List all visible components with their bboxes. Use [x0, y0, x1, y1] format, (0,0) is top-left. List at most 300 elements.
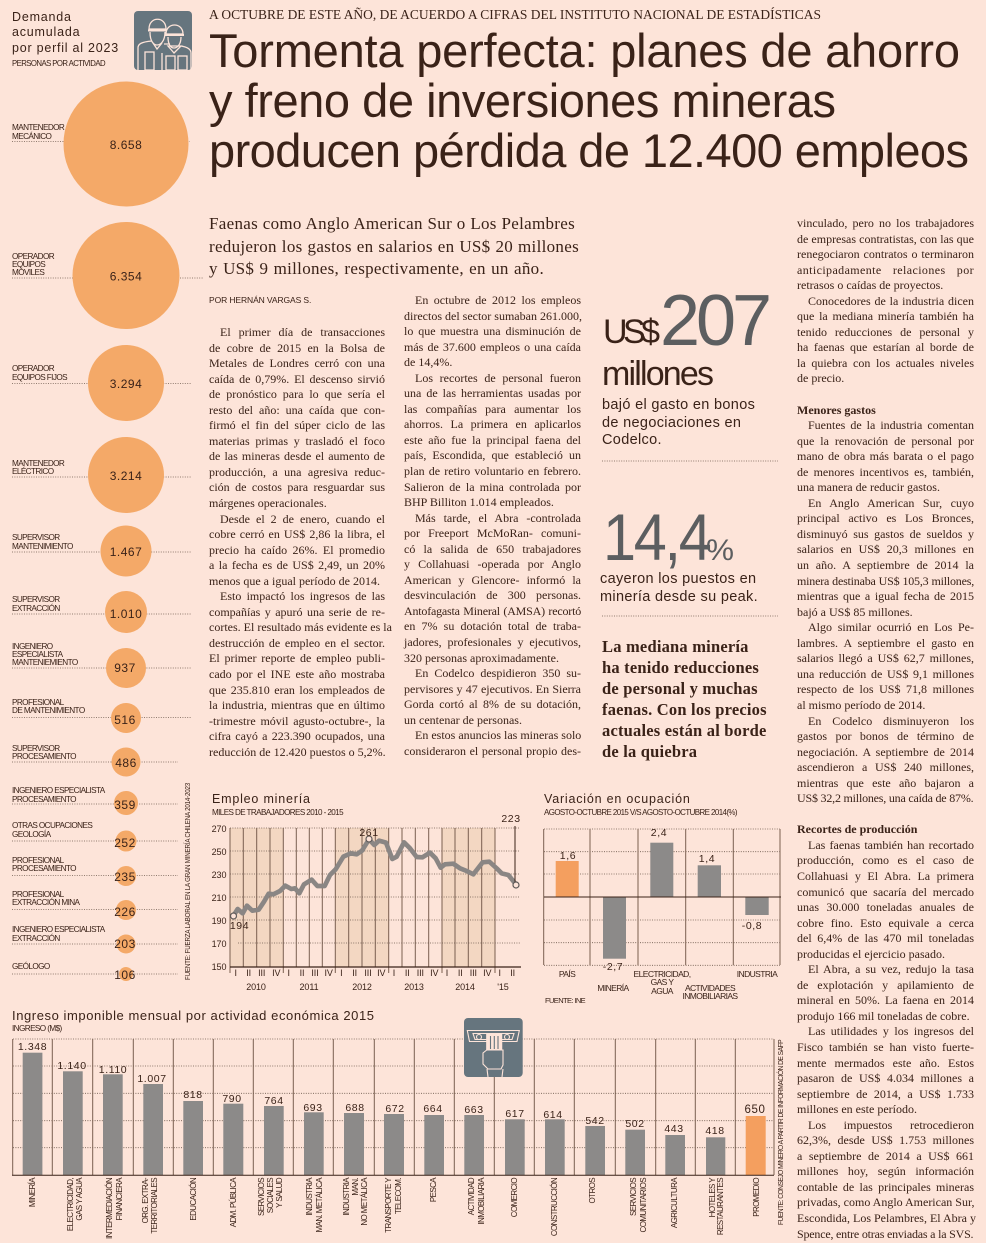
text column 2: Salieron de la mina controlada por — [404, 480, 581, 494]
text column 1: Desde el 2 de enero, cuando el — [220, 512, 385, 526]
chart: ingreso imponible mensual: Ingreso imponible mensual por actividad económica 2015 — [12, 1008, 374, 1023]
text column 3: respecto de los US$ 71,8 millones — [797, 682, 974, 696]
bubble: supervisor extracción: 1.010 — [110, 607, 142, 621]
chart: empleo minería — [212, 792, 521, 992]
bar labels: PROMEDIO — [752, 1178, 761, 1217]
chart: empleo minería: Empleo minería — [212, 792, 311, 806]
callout: US$ 207 millones: millones — [602, 355, 714, 393]
bubble: ingeniero especialista procesamiento: 359 — [114, 798, 136, 812]
text column 2: directos del sector sumaban 261.000, — [404, 309, 582, 323]
text column 3: privadas, como Anglo American Sur, — [797, 1195, 974, 1209]
bar values: 542 — [585, 1115, 605, 1127]
text column 1: cortes. El resultado más evidente es la — [209, 620, 392, 634]
text column 2: una de las herramientas usadas por — [404, 386, 581, 400]
bar labels: Y SALUD — [275, 1177, 284, 1208]
bar values: 664 — [423, 1103, 443, 1115]
icon: cash machine hand — [464, 1018, 523, 1077]
callout text: gasto en bonos — [602, 397, 755, 448]
text column 1: caída de 0,79%. El descenso sirvió — [209, 372, 385, 386]
bar values: 764 — [264, 1095, 284, 1107]
lead paragraph: y US$ 9 millones, respectivamente, en un año. — [209, 259, 544, 278]
text column 3: Los impuestos retrocedieron — [808, 1118, 974, 1132]
callout: US$ 207 millones: 207 — [660, 281, 772, 361]
bubble: operador equipos fijos: OPERADOR — [12, 364, 55, 373]
text column 3: 62,3%, desde US$ 1.753 millones — [797, 1133, 974, 1147]
bar labels — [28, 1177, 761, 1239]
text column 3: de precio. — [797, 371, 844, 385]
text column 2: Antofagasta Mineral (AMSA) recortó — [404, 604, 581, 618]
bar: electricidad gas y agua: 2,4 — [651, 827, 667, 839]
text column 2: por Freeport McMoRan- comuni- — [404, 526, 581, 540]
chart: empleo minería: 2013 — [404, 982, 424, 992]
chart: empleo minería: IV — [325, 968, 333, 978]
text column 2: desvinculación de 300 personas. — [404, 588, 581, 602]
bar values: 650 — [744, 1104, 766, 1116]
text column 1: El primer día de transacciones — [220, 325, 385, 339]
callout: US$ 207 millones — [602, 281, 772, 393]
text column 1: márgenes operacionales. — [209, 496, 327, 510]
source: consejo minero: FUENTE: CONSEJO MINERO A PARTIR DE INFORMACIÓN DE SAFP — [776, 1039, 785, 1225]
text column 3: Collahuasi y El Abra. La primera — [797, 869, 974, 883]
text column 2: de 14,4%. — [404, 355, 452, 369]
title: y freno de inversiones mineras — [209, 74, 836, 127]
callout text: puestos: minería desde su peak. — [600, 588, 758, 604]
bubble: ingeniero especialista procesamiento: INGENIERO ESPECIALISTA — [12, 786, 106, 795]
bar: electricidad gas y agua: AGUA — [651, 986, 674, 996]
text column 3: que la mediana minería también ha — [797, 309, 974, 323]
chart: empleo minería: IV — [377, 968, 386, 978]
chart: empleo minería: II — [300, 968, 304, 978]
bubble: operador equipos móviles: 6.354 — [110, 270, 142, 284]
text column 3: minera destinaba US$ 105,3 millones, — [797, 574, 974, 588]
text column 3: negociación. A septiembre de 2014 — [797, 745, 974, 759]
bubble: mantenedor mecánico: MANTENEDOR — [12, 123, 65, 132]
text column 3: de explotación y apilamiento de — [797, 978, 974, 992]
chart: variación en ocupación: AGOSTO-OCTUBRE 2015 V/S AGOSTO-OCTUBRE 2014(%) — [544, 808, 738, 817]
bar: electricidad gas y agua — [634, 827, 691, 996]
source: fuerza laboral: FUENTE: FUERZA LABORAL EN LA GRAN MINERÍA CHILENA 2014-2023 — [183, 783, 192, 980]
chart: empleo minería: 210 — [212, 893, 226, 903]
bubble: profesional procesamiento: PROFESIONAL — [12, 856, 65, 865]
chart: empleo minería: 270 — [212, 824, 226, 834]
bubble: operador equipos móviles: OPERADOR — [12, 252, 55, 261]
text column 3: millones hoy, según información — [797, 1164, 974, 1178]
chart: empleo minería: 190 — [212, 916, 226, 926]
bar labels: CONSTRUCCIÓN — [550, 1177, 559, 1236]
text column 2: 320 personas aproximadamente. — [404, 651, 559, 665]
chart: empleo minería: 170 — [212, 939, 226, 949]
bubble: mantenedor eléctrico — [12, 437, 164, 513]
text column 2: este año fue la principal faena del — [404, 433, 581, 447]
text column 1: Metales de Londres cerró con una — [209, 356, 385, 370]
chart: variación en ocupación: FUENTE: INE — [545, 996, 586, 1005]
bubble: otras ocupaciones geología: 252 — [114, 836, 136, 850]
bubble: geólogo: GEÓLOGO — [12, 961, 50, 971]
text column 2: ahorros. La primera en aplicarlos — [404, 417, 581, 431]
bar labels: SERVICIOS — [257, 1178, 266, 1216]
text column 3: disminuyó sus gastos de sueldos y — [797, 527, 974, 541]
chart: empleo minería: III — [417, 968, 424, 978]
text column 3: ha faenas que estarían al borde de — [797, 340, 974, 354]
bubble: operador equipos móviles: EQUIPOS — [12, 260, 46, 269]
chart: empleo minería: III — [364, 968, 372, 978]
bar: minería — [597, 897, 630, 993]
bubble: ingeniero especialista mantenimiento: INGENIERO — [12, 642, 53, 651]
bubble: mantenedor eléctrico: MANTENEDOR — [12, 459, 65, 468]
text column 2: Gorda cortó al 8% de su dotación, — [404, 697, 581, 711]
text column 3: vinculado, pero no los trabajadores — [797, 216, 974, 230]
bubble: profesional de mantenimiento — [12, 698, 141, 733]
bar labels: RESTAURANTES — [716, 1178, 725, 1235]
chart: variación en ocupación — [544, 792, 781, 1005]
bar labels: TRANSPORTE Y — [384, 1177, 393, 1233]
text column 3: al mismo período de 2014. — [797, 698, 925, 712]
bubble: profesional extracción mina: 226 — [114, 905, 136, 919]
text column 3: un año. A septiembre de 2014 la — [797, 558, 974, 572]
bubble: mantenedor eléctrico: 3.214 — [110, 469, 142, 483]
text column 3: salarios en US$ 20,3 millones en — [797, 542, 974, 556]
text column 3: millones en este período. — [797, 1102, 917, 1116]
bubble: supervisor mantenimiento: 1.467 — [110, 545, 142, 559]
chart: empleo minería: 2010 — [246, 982, 266, 992]
chart: empleo minería: 223 — [501, 813, 521, 825]
lead paragraph — [209, 214, 579, 278]
bubble: geólogo: 106 — [114, 968, 136, 982]
bubble: supervisor extracción: EXTRACCIÓN — [12, 603, 60, 613]
bubble: otras ocupaciones geología: GEOLOGÍA — [12, 829, 52, 839]
bar values: 1.007 — [137, 1073, 167, 1085]
bar labels: AGRICULTURA — [670, 1177, 679, 1228]
bar: actividades inmobiliarias: ACTIVIDADES — [685, 983, 736, 993]
bar values: 688 — [345, 1102, 365, 1114]
text column 3: una reducción de US$ 9,1 millones — [797, 667, 974, 681]
bar values: 502 — [625, 1118, 645, 1130]
text column 2: có la salida de 650 trabajadores — [404, 542, 581, 556]
chart: empleo minería: 230 — [212, 870, 226, 880]
bubble: profesional extracción mina: PROFESIONAL — [12, 890, 65, 899]
callout: 14,4%: % — [706, 534, 734, 567]
text column 2: jadores, profesionales y ejecutivos, — [404, 635, 581, 649]
text column 3: Conocedores de la industria dicen — [808, 294, 974, 308]
text column 1: destrucción de empleo en el sector. — [209, 636, 385, 650]
text column 3: unas 30.000 toneladas anuales de — [797, 900, 974, 914]
text column 2: Más tarde, el Abra -controlada — [415, 511, 581, 525]
bar labels: GAS Y AGUA — [75, 1177, 84, 1221]
bar labels: TELECOM. — [394, 1178, 403, 1214]
chart: empleo minería: '15 — [497, 982, 509, 992]
bar values: 614 — [543, 1109, 563, 1121]
text column 1: compañías y apuró una serie de re- — [209, 605, 385, 619]
chart: empleo minería: I — [234, 968, 237, 978]
text column 3: mano de obra más barata o el pago — [797, 449, 974, 463]
bar: industria: INDUSTRIA — [737, 969, 778, 979]
lead paragraph: Faenas como Anglo American Sur o Los Pelambres — [209, 214, 575, 233]
text column 2: y Collahuasi -operada por Anglo — [404, 557, 581, 571]
callout text: puestos: cayeron los puestos en — [600, 571, 756, 587]
bubble: otras ocupaciones geología — [12, 821, 136, 852]
callout text: gasto en bonos: de negociaciones en — [602, 414, 741, 430]
chart: empleo minería: IV — [430, 968, 439, 978]
bar: minería: MINERÍA — [597, 983, 630, 993]
bubble: supervisor procesamiento — [12, 744, 140, 776]
bubble chart: demand by profile — [12, 82, 203, 982]
chart: empleo minería: I — [287, 968, 290, 978]
bar labels: ELECTRICIDAD, — [66, 1178, 75, 1231]
bubble: supervisor mantenimiento — [12, 526, 152, 576]
text column 1: producción, a una agresiva reduc- — [209, 465, 385, 479]
panel heading: demanda acumulada — [12, 10, 119, 68]
bar values: 818 — [183, 1089, 203, 1101]
bar values: 443 — [664, 1123, 684, 1135]
text column 3: ascendieron a US$ 240 millones, — [797, 760, 974, 774]
text column 3: principal activo es Los Bronces, — [797, 511, 974, 525]
chart: empleo minería: 261 — [359, 827, 379, 839]
bar values: 672 — [385, 1103, 405, 1115]
icon: mine workers — [134, 11, 192, 70]
bubble: ingeniero especialista mantenimiento: MANTENIEMIENTO — [12, 658, 78, 667]
text column 1: de pronóstico para lo que sería el — [209, 387, 385, 401]
chart: empleo minería: I — [393, 968, 395, 978]
pull quote: La mediana minería — [602, 637, 749, 656]
text column 3: tenido reducciones de personal y — [797, 325, 974, 339]
chart: empleo minería: II — [352, 968, 357, 978]
text column 3: Menores gastos — [797, 403, 876, 417]
chart: empleo minería: II — [458, 968, 463, 978]
callout text: puestos — [600, 571, 758, 604]
bar values: 693 — [303, 1102, 323, 1114]
text column 3: Spence, entre otras enviadas a la SVS. — [797, 1227, 973, 1241]
text column 1: de las mineras desde el aumento de — [209, 449, 385, 463]
text column 1: de cobre de 2015 en la Bolsa de — [209, 341, 385, 355]
bar labels: FINANCIERA — [115, 1177, 124, 1220]
bubble: mantenedor eléctrico: ELÉCTRICO — [12, 466, 54, 476]
text column 3: contable de las principales mineras — [797, 1180, 974, 1194]
bar labels: ORG. EXTRA- — [141, 1177, 150, 1223]
chart: empleo minería: II — [510, 968, 515, 978]
bubble: operador equipos móviles — [12, 222, 180, 329]
bar labels: ACTIVIDAD — [467, 1177, 476, 1215]
text column 1: El primer reporte de empleo publi- — [209, 651, 385, 665]
text column 3: bajó a US$ 85 millones. — [797, 605, 913, 619]
bubble: ingeniero especialista mantenimiento: 937 — [114, 661, 136, 675]
bar: industria: -0,8 — [742, 920, 762, 932]
title: Tormenta perfecta: planes de ahorro — [209, 24, 960, 77]
bar labels: TERRITORIALES — [150, 1178, 159, 1234]
bar labels: EDUCACIÓN — [189, 1177, 198, 1221]
bar: minería: -2,7 — [603, 961, 623, 973]
bubble: profesional de mantenimiento: DE MANTENIMIENTO — [12, 706, 85, 715]
text column 2: más de 37.600 empleos o una caída — [404, 340, 581, 354]
text column 1: reducción de 12.420 puestos o 5,2%. — [209, 745, 386, 759]
bar labels: COMUNITARIOS — [639, 1178, 648, 1232]
text column 3: mineral en 50%. La faena en 2014 — [797, 993, 974, 1007]
text column 2: consideraron el personal propio des- — [404, 744, 581, 758]
bubble: supervisor extracción — [12, 591, 147, 633]
bar labels: COMERCIO — [510, 1178, 519, 1217]
title — [209, 24, 969, 177]
bar labels: INMOBILIARIA — [477, 1177, 486, 1225]
text column 1: materias primas y trasladó el foco — [209, 434, 385, 448]
text column 3: lambres. A septiembre el gasto en — [797, 636, 974, 650]
text column 2: un centenar de personas. — [404, 713, 522, 727]
text column 3: cobre fino. Esto equivale a cerca — [797, 916, 974, 930]
bar: electricidad gas y agua: ELECTRICIDAD, — [634, 969, 691, 979]
bar: país: PAÍS — [559, 969, 576, 979]
bar labels: SERVICIOS — [629, 1178, 638, 1216]
text column 2: lo que muestra una disminución de — [404, 324, 581, 338]
pull quote: ha tenido reducciones — [602, 658, 759, 677]
text column 3: a septiembre de 2014 a US$ 661 — [797, 1149, 974, 1163]
bar labels: OTROS — [588, 1178, 597, 1203]
bubble: profesional procesamiento: 235 — [114, 870, 136, 884]
text column 3: una manera de reducir gastos. — [797, 480, 940, 494]
text column 3: Algo similar ocurrió en Los Pe- — [808, 620, 974, 634]
bars: income by activity — [23, 1053, 766, 1175]
text column 3: comunicó que sacaría del mercado — [797, 885, 974, 899]
text column 2: En Codelco despidieron 350 su- — [415, 666, 581, 680]
text column 3: En Anglo American Sur, cuyo — [808, 496, 974, 510]
bubble: ingeniero especialista extracción: 203 — [114, 937, 136, 951]
bar labels: HOTELES Y — [708, 1177, 717, 1217]
text column 1: firmó el fin del súper ciclo de las — [209, 418, 385, 432]
bar labels: SOCIALES — [266, 1178, 275, 1213]
text column 1: cado por el INE este año mostraba — [209, 667, 385, 681]
pull quote: de personal y muchas — [602, 679, 758, 698]
chart: ingreso imponible mensual: INGRESO (M$) — [12, 1024, 63, 1033]
chart: empleo minería: III — [470, 968, 477, 978]
chart: empleo minería: IV — [272, 968, 281, 978]
panel heading: demanda acumulada: acumulada — [12, 25, 80, 39]
chart: empleo minería: 250 — [212, 847, 226, 857]
text column 1: -trimestre móvil agusto-octubre-, la — [209, 714, 385, 728]
text column 1: que 235.810 eran los empleados de — [209, 683, 385, 697]
bar labels: MINERÍA — [28, 1177, 37, 1207]
bubble: ingeniero especialista mantenimiento: ESPECIALISTA — [12, 650, 64, 659]
bubble: profesional de mantenimiento: PROFESIONAL — [12, 698, 65, 707]
callout: 14,4%: 14,4 — [603, 501, 711, 575]
bubble: mantenedor mecánico — [12, 82, 188, 206]
text column 2: plan de retiro voluntario en febrero. — [404, 464, 581, 478]
text column 3: Las utilidades y los ingresos del — [808, 1024, 974, 1038]
bar labels: NO METÁLICA — [360, 1177, 369, 1226]
bar labels: INTERMEDIACIÓN — [105, 1177, 114, 1239]
chart: empleo minería: 194 — [230, 920, 249, 932]
chart: ingreso imponible mensual — [12, 1008, 785, 1239]
callout: US$ 207 millones: US$ — [603, 313, 660, 351]
chart: empleo minería: MILES DE TRABAJADORES 2010 - 2015 — [212, 808, 344, 817]
text column 2: En estos anuncios las mineras solo — [415, 728, 581, 742]
bar labels: INDUSTRIA — [342, 1177, 351, 1216]
chart: empleo minería: IV — [483, 968, 492, 978]
text column 2: las compañías para aumentar los — [404, 402, 581, 416]
bubble: geólogo — [12, 961, 136, 982]
text column 3: salarios llegó a US$ 62,7 millones, — [797, 651, 974, 665]
bar labels: MAN. METÁLICA — [315, 1177, 324, 1232]
chart: empleo minería: 2014 — [455, 982, 475, 992]
callout text: gasto en bonos: bajó el gasto en bonos — [602, 397, 755, 413]
bar values: 1.348 — [18, 1041, 47, 1053]
bar labels: MAN. — [351, 1178, 360, 1196]
bubble: operador equipos fijos: EQUIPOS FIJOS — [12, 373, 68, 382]
chart: empleo minería: II — [405, 968, 410, 978]
bubble: ingeniero especialista procesamiento: PROCESAMIENTO — [12, 795, 76, 804]
line: employment series — [233, 839, 517, 916]
bubble: ingeniero especialista procesamiento — [12, 786, 138, 815]
text column 3: producción, como es el caso de — [797, 853, 974, 867]
text column 3: mientras que a igual fecha de 2015 — [797, 589, 974, 603]
pull quote: de la quiebra — [602, 742, 697, 761]
text column 3: US$ 32,2 millones, una caída de 87%. — [797, 791, 973, 805]
text column 3: de empresas contratistas, con las que — [797, 232, 974, 246]
text column 3: mientras que este año bajaron a — [797, 776, 974, 790]
text column 3: gastos por bonos de término de — [797, 729, 974, 743]
text column 3: Las faenas también han recortado — [808, 838, 974, 852]
bar: actividades inmobiliarias: 1,4 — [699, 853, 715, 865]
bubble: ingeniero especialista extracción: EXTRACCIÓN — [12, 933, 60, 943]
text column 3: renegociaron contratos o terminaron — [797, 247, 974, 261]
chart: empleo minería: 2012 — [352, 982, 372, 992]
text column 3: septiembre de 2014, a US$ 1.733 — [797, 1087, 974, 1101]
panel heading: demanda acumulada: PERSONAS POR ACTIVIDAD — [12, 59, 106, 68]
text column 2: país, Escondida, que estableció un — [404, 448, 581, 462]
bar values: 418 — [705, 1125, 725, 1137]
bar values: 790 — [222, 1093, 242, 1105]
kicker: A OCTUBRE DE ESTE AÑO, DE ACUERDO A CIFRAS DEL INSTITUTO NACIONAL DE ESTADÍSTICAS — [209, 6, 821, 23]
bubble: profesional procesamiento: PROCESAMIENTO — [12, 864, 76, 873]
pull quote: faenas. Con los precios — [602, 700, 767, 719]
bar: país: 1,6 — [560, 850, 576, 862]
text column 3: Fuentes de la industria comentan — [808, 418, 974, 432]
bar: electricidad gas y agua: GAS Y — [651, 977, 674, 987]
text column 1: a la fecha es de US$ 2,49, un 20% — [209, 558, 385, 572]
bubble: supervisor extracción: SUPERVISOR — [12, 595, 60, 604]
bubble: mantenedor mecánico: 8.658 — [110, 138, 142, 152]
text column 2: American y Glencore- informó la — [404, 573, 581, 587]
bar: país — [556, 850, 579, 979]
text column 3: Recortes de producción — [797, 822, 917, 836]
chart: empleo minería: III — [258, 968, 265, 978]
text column 1: Esto impactó los ingresos de las — [220, 589, 385, 603]
bubble: profesional de mantenimiento: 516 — [114, 713, 136, 727]
text column 3: de menores incentivos es, también, — [797, 465, 974, 479]
pull quote: actuales están al borde — [602, 721, 767, 740]
text column 3: producidas el ejercicio pasado. — [797, 947, 945, 961]
bubble: otras ocupaciones geología: OTRAS OCUPACIONES — [12, 821, 93, 830]
bubble: ingeniero especialista mantenimiento — [12, 642, 146, 688]
text column 2: En octubre de 2012 los empleos — [415, 293, 581, 307]
bar: actividades inmobiliarias: INMOBILIARIAS — [682, 991, 738, 1001]
text column 3: El Abra, a su vez, redujo la tasa — [808, 962, 974, 976]
callout text: gasto en bonos: Codelco. — [602, 432, 662, 448]
bubble: profesional procesamiento — [12, 856, 136, 886]
text column 3: mente mermados este año. Estos — [797, 1056, 974, 1070]
byline: POR HERNÁN VARGAS S. — [209, 295, 311, 305]
chart: empleo minería: 150 — [212, 962, 226, 972]
bar values: 1.140 — [57, 1060, 87, 1072]
bubble: supervisor mantenimiento: SUPERVISOR — [12, 533, 60, 542]
chart: empleo minería: 2011 — [300, 982, 319, 992]
text column 1 — [209, 325, 392, 759]
text column 2: BHP Billiton 1.014 empleados. — [404, 495, 554, 509]
chart: empleo minería: III — [311, 968, 319, 978]
bubble: operador equipos fijos: 3.294 — [110, 377, 142, 391]
text column 1: cobre cerró en US$ 2,86 la libra, el — [209, 527, 385, 541]
bubble: supervisor mantenimiento: MANTENIMIENTO — [12, 542, 73, 551]
text column 3: retrasos o caídas de proyectos. — [797, 278, 943, 292]
text column 3: Fisco también se han visto fuerte- — [797, 1040, 974, 1054]
bar labels: PESCA — [429, 1177, 438, 1202]
bubble: supervisor procesamiento: PROCESAMIENTO — [12, 752, 76, 761]
